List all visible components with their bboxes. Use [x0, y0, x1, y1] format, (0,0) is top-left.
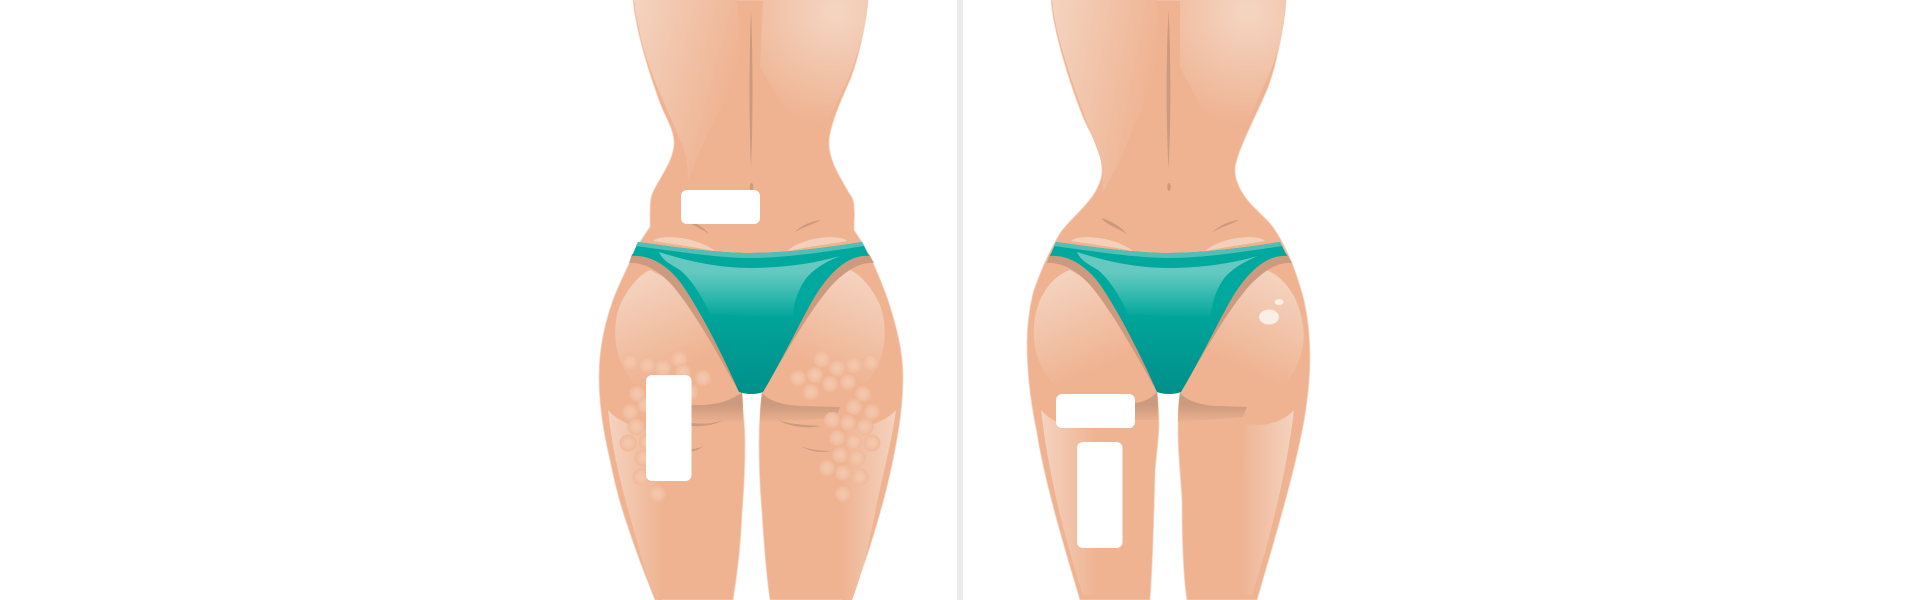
waist highlight right [1205, 237, 1265, 251]
white label box: waist [681, 190, 760, 224]
hip dimple right [794, 220, 821, 233]
crease shadow left [1130, 392, 1158, 420]
cellulite bumps [620, 350, 880, 502]
hip dimple left [682, 218, 709, 234]
torso right highlight [1180, 0, 1286, 163]
white label box: thigh [1077, 442, 1122, 548]
crease shadow right [760, 393, 840, 422]
body silhouette [599, 0, 903, 600]
highlights: skin shine [1259, 299, 1284, 324]
bikini inner panel [1077, 252, 1258, 318]
buttock highlight left [615, 270, 740, 405]
white label box: thigh [646, 375, 692, 481]
body silhouette [1027, 0, 1310, 600]
bikini top band [636, 242, 864, 258]
crease marks [690, 420, 832, 452]
belly line [1167, 10, 1170, 169]
waist highlight left [1071, 237, 1133, 251]
bikini [632, 242, 869, 394]
navel [1167, 183, 1171, 191]
buttock highlight left [1034, 270, 1158, 405]
figure: after (right body) [1027, 0, 1310, 600]
torso left highlight [1052, 0, 1158, 193]
figure: before (left body) [599, 0, 903, 600]
buttock highlight right [762, 270, 885, 405]
bikini inner panel [659, 252, 840, 318]
thigh highlight right [842, 410, 896, 600]
bikini [1050, 242, 1287, 394]
torso right highlight [760, 0, 868, 160]
hip dimple left [1101, 218, 1127, 234]
thigh highlight right [1241, 410, 1294, 595]
crease shadow left [690, 392, 743, 424]
navel [750, 183, 753, 191]
bikini shadow [1047, 254, 1292, 392]
bikini shadow [629, 254, 874, 392]
waist highlight right [787, 237, 847, 251]
waist highlight left [653, 237, 715, 251]
thigh highlight left [1041, 410, 1097, 595]
white label box: hip [1056, 394, 1135, 428]
bikini top band [1054, 242, 1282, 258]
crease shadow right [1178, 393, 1247, 422]
divider between figures [957, 0, 963, 600]
buttock highlight right [1180, 270, 1304, 405]
hip dimple right [1212, 220, 1239, 233]
thigh highlight left [608, 410, 662, 600]
torso left highlight [634, 0, 742, 180]
belly line [750, 10, 752, 169]
